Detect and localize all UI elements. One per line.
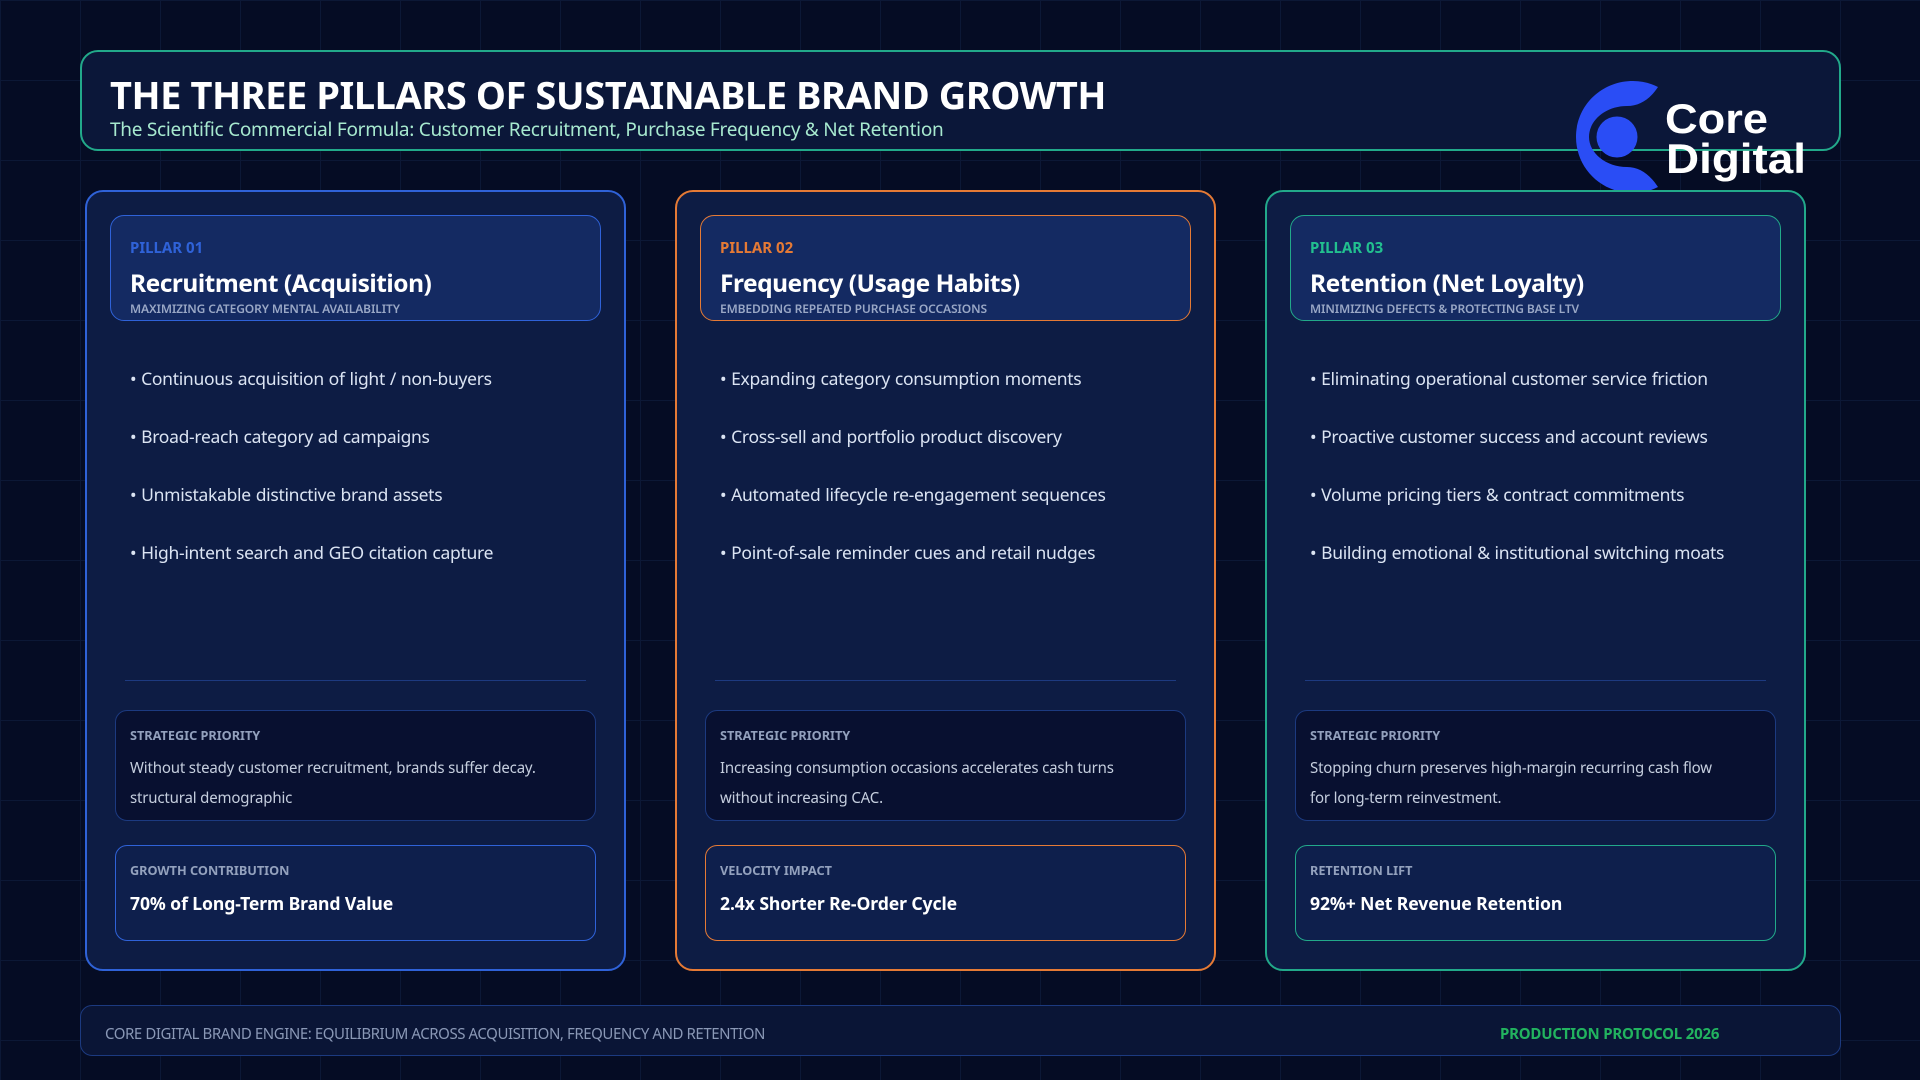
footer bar: [80, 1005, 1841, 1056]
pillar 03 strategic priority: Stopping churn preserves high-margin recurring cash flow: [1310, 758, 1712, 778]
pillar 03 retention lift: 92%+ Net Revenue Retention: [1310, 892, 1562, 916]
panel: pillar 02 frequency: [675, 190, 1216, 971]
pillar 03 bullets: • Volume pricing tiers & contract commitments: [1310, 483, 1684, 507]
pillar 03 retention lift: [1295, 845, 1776, 941]
pillar 01 growth contribution: GROWTH CONTRIBUTION: [130, 861, 289, 879]
pillar 02 strategic priority: Increasing consumption occasions accelerates cash turns: [720, 758, 1114, 778]
pillar 01 strategic priority: structural demographic: [130, 788, 292, 808]
pillar 02 header: EMBEDDING REPEATED PURCHASE OCCASIONS: [720, 300, 987, 317]
pillar 03 bullets: • Proactive customer success and account reviews: [1310, 425, 1708, 449]
pillar 02 bullets: • Point-of-sale reminder cues and retail nudges: [720, 541, 1095, 565]
pillar 02 bullets: • Cross-sell and portfolio product discovery: [720, 425, 1062, 449]
pillar 01 growth contribution: [115, 845, 596, 941]
header panel: [80, 50, 1841, 151]
pillar 03 retention lift: RETENTION LIFT: [1310, 861, 1412, 879]
panel: pillar 01 recruitment: [85, 190, 626, 971]
pillar 03 bullets: • Building emotional & institutional switching moats: [1310, 541, 1724, 565]
pillar 03 header: MINIMIZING DEFECTS & PROTECTING BASE LTV: [1310, 300, 1579, 317]
pillar 01 bullets: • Continuous acquisition of light / non-buyers: [130, 367, 492, 391]
pillar 01 strategic priority: [115, 710, 596, 821]
pillar 01 header: [110, 215, 601, 321]
pillar 01 bullets: • Unmistakable distinctive brand assets: [130, 483, 442, 507]
logo: Core Digital: Digital: [1666, 135, 1806, 182]
pillar 02 velocity impact: 2.4x Shorter Re-Order Cycle: [720, 892, 957, 916]
pillar 01 growth contribution: 70% of Long-Term Brand Value: [130, 892, 393, 916]
footer note: CORE DIGITAL BRAND ENGINE: EQUILIBRIUM ACROSS ACQUISITION, FREQUENCY AND RETENTION: [105, 1024, 765, 1044]
pillar 02 strategic priority: [705, 710, 1186, 821]
pillar 01 header: MAXIMIZING CATEGORY MENTAL AVAILABILITY: [130, 300, 400, 317]
pillar 01 bullets: • High-intent search and GEO citation capture: [130, 541, 493, 565]
pillar 01 header: Recruitment (Acquisition): [130, 267, 431, 300]
pillar 03 header: Retention (Net Loyalty): [1310, 267, 1584, 300]
pillar 02 velocity impact: VELOCITY IMPACT: [720, 861, 832, 879]
footer protocol: PRODUCTION PROTOCOL 2026: [1500, 1024, 1719, 1044]
pillar 02 bullets: • Expanding category consumption moments: [720, 367, 1081, 391]
pillar 03 strategic priority: for long-term reinvestment.: [1310, 788, 1501, 808]
pillar 02 strategic priority: without increasing CAC.: [720, 788, 883, 808]
pillar 03 header: PILLAR 03: [1310, 238, 1383, 258]
pillar 02 header: PILLAR 02: [720, 238, 793, 258]
pillar 02 bullets: [720, 367, 1106, 565]
pillar 02 strategic priority: STRATEGIC PRIORITY: [720, 726, 850, 744]
pillar 02 bullets: • Automated lifecycle re-engagement sequences: [720, 483, 1106, 507]
pillar 02 header: Frequency (Usage Habits): [720, 267, 1020, 300]
pillar 01 header: PILLAR 01: [130, 238, 203, 258]
pillar 01 bullets: • Broad-reach category ad campaigns: [130, 425, 430, 449]
pillar 01 strategic priority: Without steady customer recruitment, brands suffer decay.: [130, 758, 536, 778]
pillar 03 strategic priority: STRATEGIC PRIORITY: [1310, 726, 1440, 744]
pillar 03 bullets: • Eliminating operational customer service friction: [1310, 367, 1708, 391]
panel: pillar 03 retention: [1265, 190, 1806, 971]
pillar 01 bullets: [130, 367, 493, 565]
pillar 02 velocity impact: [705, 845, 1186, 941]
pillar 03 header: [1290, 215, 1781, 321]
pillar 03 strategic priority: [1295, 710, 1776, 821]
pillar 01 strategic priority: STRATEGIC PRIORITY: [130, 726, 260, 744]
subtitle: The Scientific Commercial Formula: Customer Recruitment, Purchase Frequency & Net Retention: [110, 116, 944, 142]
logo: Core Digital: Core: [1665, 95, 1768, 142]
pillar 03 bullets: [1310, 367, 1724, 565]
title: THE THREE PILLARS OF SUSTAINABLE BRAND GROWTH: [110, 69, 1106, 121]
logo: Core Digital: [1576, 81, 1806, 190]
pillar 02 header: [700, 215, 1191, 321]
